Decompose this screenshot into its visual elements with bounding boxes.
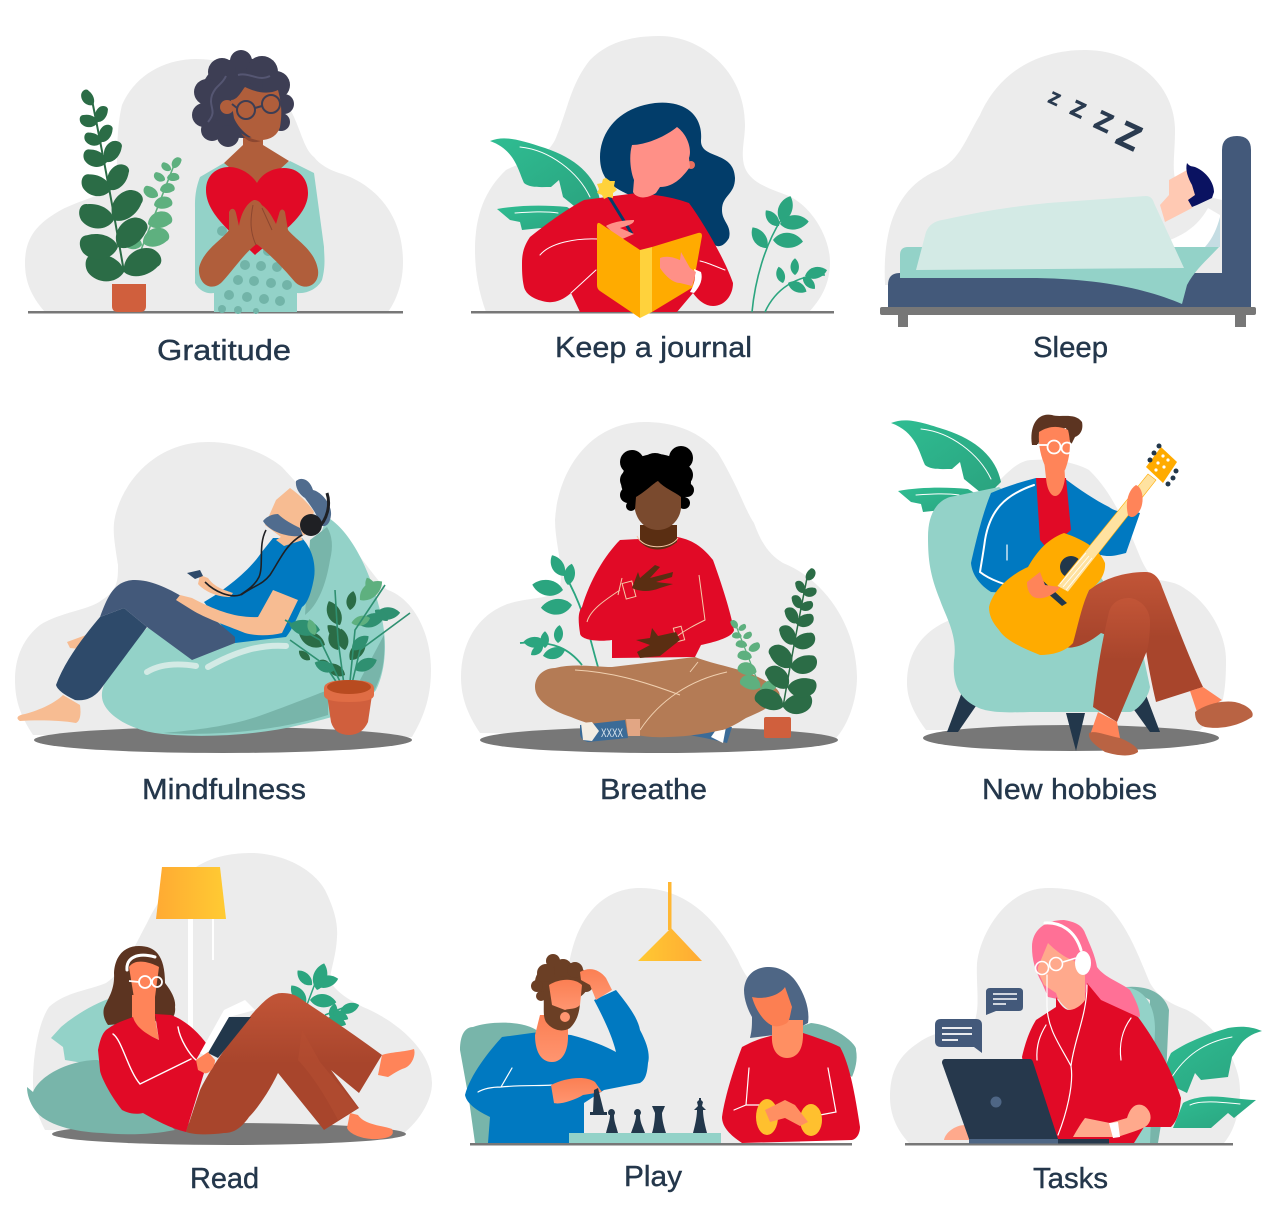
scene: Keep a journal bbox=[471, 36, 834, 318]
icon: dark plant bbox=[752, 567, 820, 719]
figure: man listening with headphones bbox=[18, 479, 331, 723]
icon: plant pot bbox=[764, 717, 791, 738]
figure: woman at chess bbox=[722, 967, 860, 1143]
icon: tropical leaves bbox=[490, 138, 600, 233]
background blob bbox=[907, 460, 1226, 730]
zzz sleep letters: Z bbox=[1090, 105, 1118, 139]
scene: Play bbox=[460, 882, 860, 1146]
ground line bbox=[471, 311, 834, 314]
cushions bbox=[27, 997, 175, 1134]
background blob bbox=[461, 422, 857, 738]
scene: Sleep bbox=[880, 50, 1256, 327]
scene: New hobbies bbox=[891, 415, 1253, 755]
figure: seated woman breathing: XXXX bbox=[601, 726, 623, 740]
icon: left teal plants bbox=[520, 552, 598, 667]
floor lamp bbox=[156, 867, 226, 1030]
figure: woman on laptop bbox=[942, 920, 1181, 1144]
background blob bbox=[885, 50, 1222, 285]
icon: right plants bbox=[747, 194, 828, 312]
label: Breathe: Breathe bbox=[600, 774, 707, 806]
scene: Gratitude bbox=[25, 50, 403, 314]
icon: speech bubble large bbox=[935, 1019, 982, 1053]
icon: tropical leaves bbox=[1165, 1027, 1262, 1128]
ground line bbox=[905, 1143, 1233, 1146]
icon: plant behind knee bbox=[287, 961, 361, 1029]
label: Play: Play bbox=[624, 1161, 683, 1193]
icon: right plants bbox=[729, 618, 779, 695]
chair bbox=[1120, 987, 1169, 1143]
label: Mindfulness: Mindfulness bbox=[142, 774, 306, 806]
label: Sleep: Sleep bbox=[1033, 332, 1108, 364]
background blob bbox=[567, 888, 800, 1143]
background blob bbox=[15, 442, 431, 737]
zzz sleep letters: Z bbox=[1067, 95, 1090, 123]
icon: speech bubble small bbox=[986, 988, 1023, 1015]
background blob bbox=[33, 853, 432, 1133]
pendant lamp bbox=[638, 882, 702, 961]
icon: plant pot bbox=[112, 284, 146, 312]
scene: Read bbox=[27, 853, 432, 1145]
background blob bbox=[25, 59, 403, 312]
figure: woman holding heart bbox=[192, 50, 324, 314]
scene: Tasks bbox=[890, 888, 1262, 1146]
figure: woman reading bbox=[98, 946, 415, 1139]
label: New hobbies: New hobbies bbox=[982, 774, 1157, 806]
ground line bbox=[28, 311, 403, 314]
figure: seated woman breathing bbox=[535, 446, 780, 743]
label: Tasks: Tasks bbox=[1033, 1163, 1108, 1195]
ground line bbox=[470, 1143, 852, 1146]
label: Read: Read bbox=[190, 1163, 259, 1195]
icon: big dark plant bbox=[75, 88, 165, 287]
figure: thinking man bbox=[465, 954, 649, 1143]
chess board and pieces bbox=[569, 1098, 721, 1143]
figure: man playing guitar bbox=[971, 415, 1253, 755]
scene: Breathe bbox=[461, 422, 857, 753]
icon: tropical leaves bbox=[891, 420, 1001, 515]
figure: sleeper head bbox=[1160, 163, 1220, 247]
icon: small light plant bbox=[119, 155, 183, 253]
beanbag bbox=[102, 517, 385, 736]
label: Keep a journal: Keep a journal bbox=[555, 332, 752, 364]
bed bbox=[880, 136, 1256, 327]
label: Gratitude: Gratitude bbox=[157, 335, 291, 367]
zzz sleep letters: Z bbox=[1046, 88, 1063, 110]
icon: potted plant bbox=[285, 576, 410, 735]
ground shadow bbox=[480, 727, 838, 753]
ground shadow bbox=[923, 725, 1219, 751]
ground shadow bbox=[52, 1123, 406, 1145]
chairs bbox=[460, 1023, 857, 1143]
figure: woman writing in journal bbox=[522, 103, 735, 318]
zzz sleep letters bbox=[1046, 88, 1148, 159]
scene: Mindfulness bbox=[15, 442, 431, 753]
ground shadow bbox=[34, 727, 412, 753]
background blob bbox=[890, 888, 1240, 1143]
background blob bbox=[475, 36, 830, 312]
zzz sleep letters: Z bbox=[1111, 112, 1148, 159]
armchair bbox=[928, 487, 1160, 751]
